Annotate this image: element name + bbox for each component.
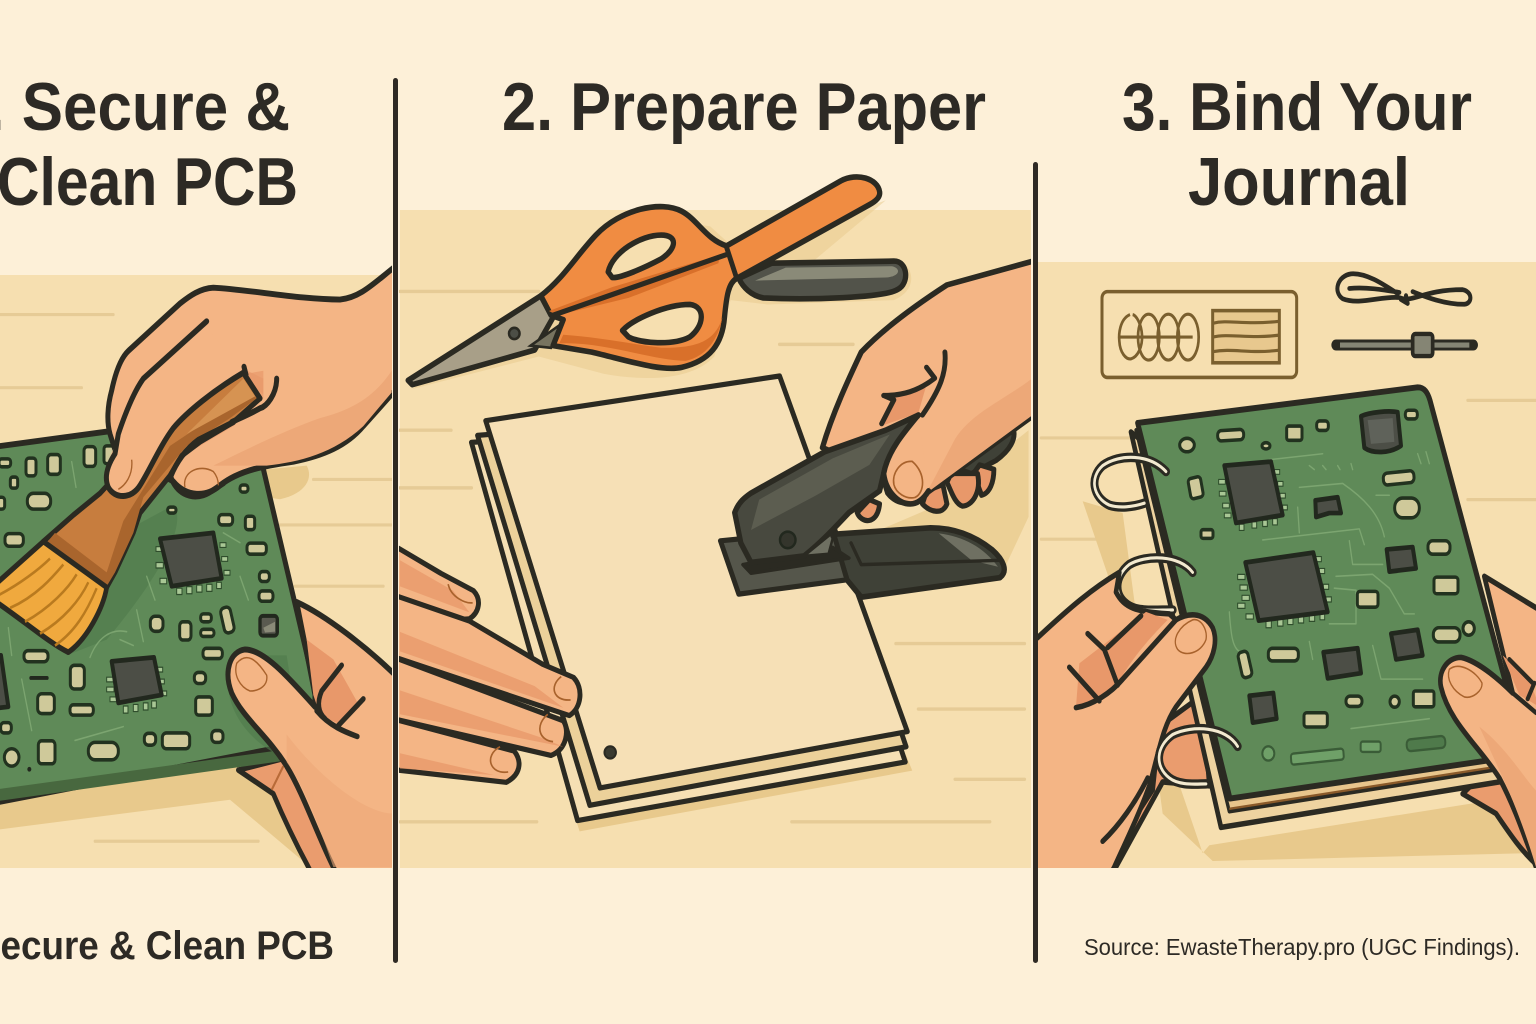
table shadow under journal — [1083, 501, 1529, 861]
hole punch tool — [720, 430, 1029, 597]
panel 1 heading — [0, 69, 298, 220]
binding rings — [1094, 457, 1193, 610]
panel 3 heading — [1122, 69, 1472, 220]
hand fingers over brush — [106, 321, 277, 496]
right hand rear — [1460, 784, 1532, 864]
punched hole — [604, 746, 616, 758]
punch upper lever — [735, 415, 918, 562]
knotted cord — [1337, 274, 1470, 304]
dark lower scissor grip — [739, 261, 906, 299]
lower hand behind board — [236, 761, 331, 868]
panel 2 heading: 2. Prepare Paper — [502, 69, 986, 145]
journal board — [1131, 387, 1511, 827]
left hand — [1038, 570, 1218, 868]
panel 1 heading: Clean PCB — [0, 144, 298, 220]
right hand with thumb — [1440, 576, 1536, 883]
panel 3 heading: Journal — [1188, 144, 1410, 220]
panel 3: bind your journal — [1023, 69, 1536, 883]
table shadow — [0, 767, 302, 860]
panel 1 illustration — [0, 260, 405, 883]
paper stack — [471, 376, 912, 831]
hand gripping punch — [735, 257, 1049, 562]
slider cord — [1336, 334, 1473, 356]
upper hand — [108, 260, 405, 494]
scissors — [408, 177, 911, 389]
divider 2 — [1033, 162, 1038, 963]
panel 1: secure and clean PCB — [0, 69, 405, 883]
bottom ring — [1159, 729, 1238, 784]
steel blade — [408, 296, 553, 385]
chips on board — [0, 533, 277, 713]
lower hand with thumb — [228, 602, 405, 883]
panel 3 heading: 3. Bind Your — [1122, 69, 1472, 145]
panel 3 illustration — [1023, 262, 1536, 883]
divider 1 — [393, 78, 398, 963]
left hand holding paper — [384, 539, 580, 782]
left hand rear — [1116, 701, 1210, 868]
materials box: coil and paper — [1102, 292, 1297, 377]
panel 2: prepare paper — [384, 69, 1049, 868]
orange handles — [541, 177, 880, 368]
journal chips — [1219, 411, 1423, 723]
brush — [0, 373, 260, 652]
green circuit board — [0, 412, 327, 804]
source note: Source: EwasteTherapy.pro (UGC Findings). — [1084, 934, 1520, 960]
panel 2 illustration — [384, 177, 1049, 868]
